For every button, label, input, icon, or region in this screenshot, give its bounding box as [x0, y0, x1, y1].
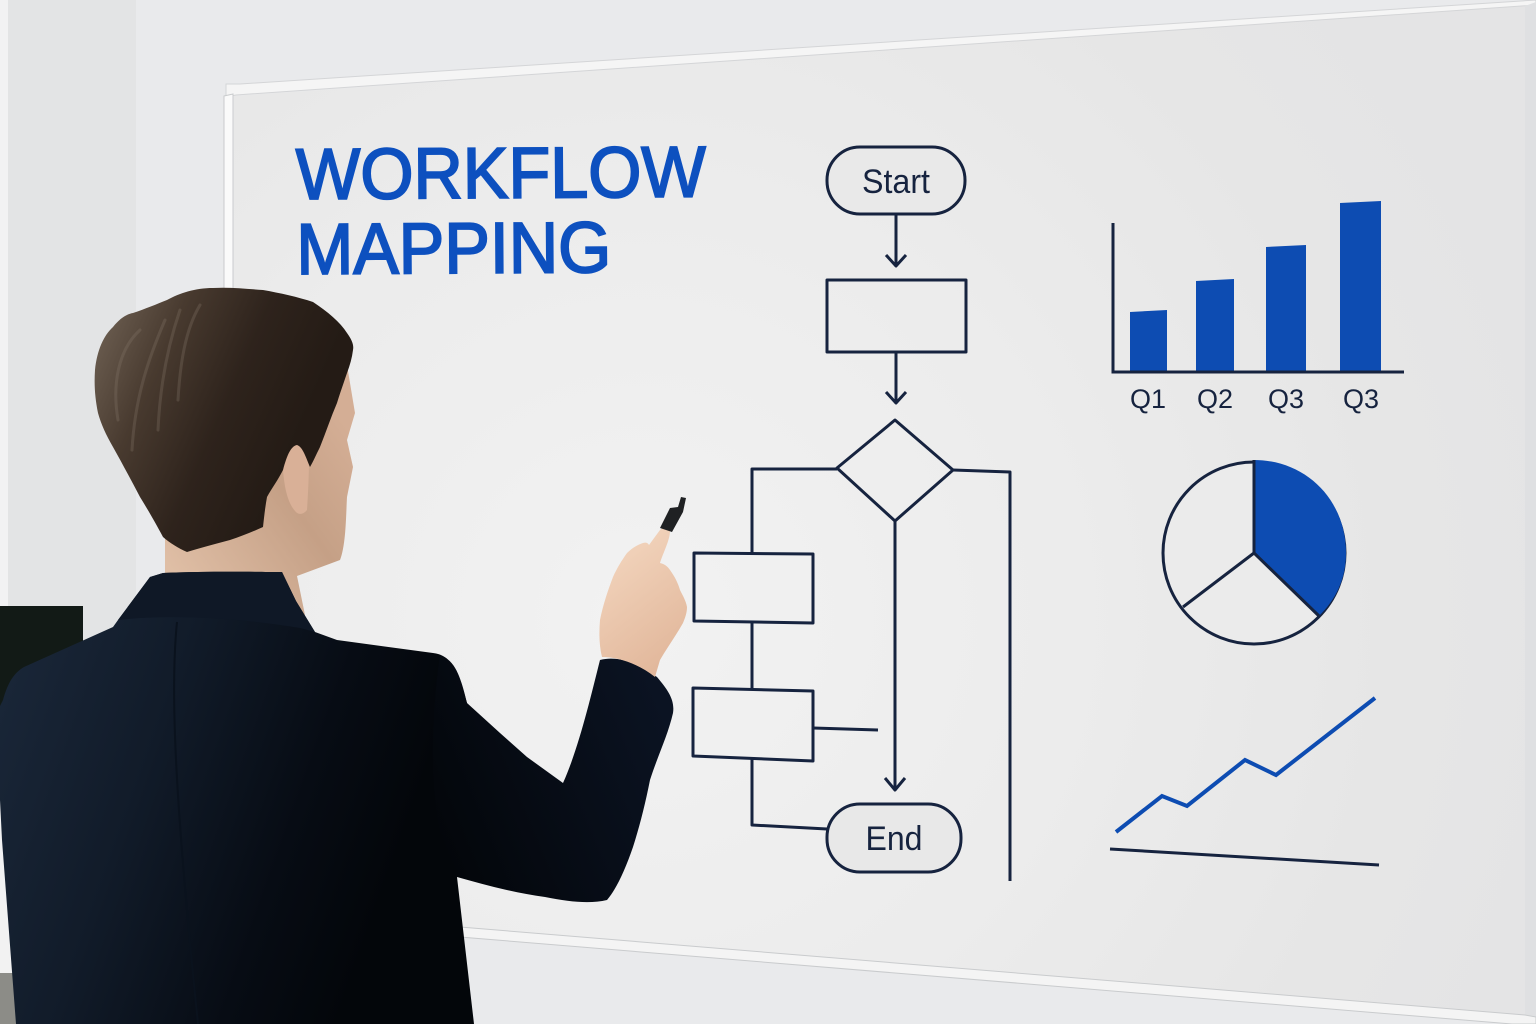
frame left [224, 94, 233, 910]
arrow: start to process [886, 214, 906, 266]
connector: decision left branch [752, 469, 837, 553]
neck and face [165, 365, 355, 615]
jacket collar [118, 572, 315, 632]
marker pen [660, 497, 686, 532]
start node: Start [862, 163, 931, 201]
quarter labels: Q3 [1343, 384, 1379, 414]
jacket sleeve [433, 655, 673, 902]
hair [95, 288, 353, 552]
frame top [226, 0, 1536, 97]
bars [1130, 201, 1381, 372]
frame bottom [460, 927, 1536, 1024]
title: WORKFLOW [296, 132, 706, 215]
hand [599, 528, 687, 677]
arrow: decision to end [885, 521, 905, 790]
title: MAPPING [296, 208, 612, 290]
ear [283, 445, 309, 514]
connector: box 3 stub [813, 728, 878, 730]
quarter labels: Q1 [1130, 384, 1166, 414]
process box 3 [693, 688, 813, 761]
hair strands [116, 305, 200, 450]
axes [1113, 223, 1404, 372]
quarter labels: Q2 [1197, 384, 1233, 414]
decision diamond [837, 420, 953, 521]
presenter [0, 288, 687, 1024]
process box 2 [694, 553, 813, 623]
quarter labels: Q3 [1268, 384, 1304, 414]
frame right [1525, 2, 1536, 1024]
quarter labels [1130, 384, 1379, 414]
bar chart [1113, 201, 1404, 414]
connector: decision right branch [953, 470, 1010, 881]
arrow: process to decision [886, 353, 906, 403]
end node: End [866, 820, 922, 858]
dark monitor in background [0, 606, 83, 716]
jacket body [0, 572, 480, 1024]
end node [827, 804, 961, 872]
connector: box 2 to box 3 [750, 622, 754, 689]
line chart [1110, 698, 1379, 865]
title [296, 132, 707, 290]
jacket back seam [174, 622, 198, 1024]
pie chart [1163, 460, 1346, 644]
connector: box 3 to end [752, 758, 827, 829]
flowchart [693, 147, 1010, 881]
shelf and floor at lower left [0, 905, 18, 1024]
process box 1 [827, 280, 966, 352]
start node [827, 147, 965, 214]
